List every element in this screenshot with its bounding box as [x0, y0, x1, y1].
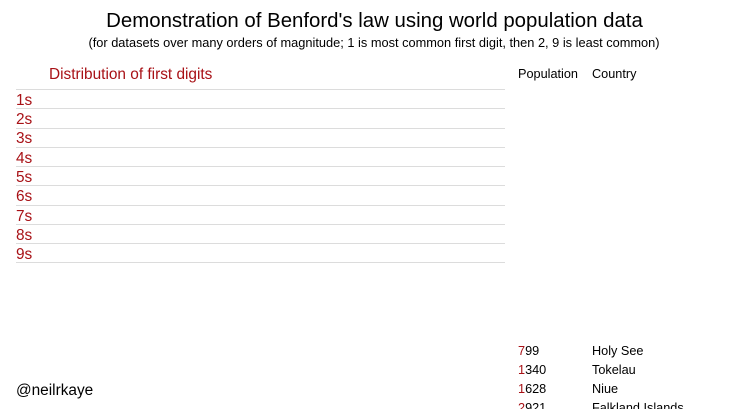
column heading: population: Population — [518, 67, 578, 81]
digit label 5s: 5s — [16, 169, 32, 186]
digit label 6s: 6s — [16, 188, 32, 205]
population row: Holy See: 799 — [518, 344, 539, 358]
digit distribution chart — [16, 89, 505, 263]
digit label 7s: 7s — [16, 208, 32, 225]
credit: @neilrkaye — [16, 382, 93, 399]
title: Demonstration of Benford's law using world population data — [106, 10, 643, 32]
population row: Niue: Niue — [592, 382, 618, 396]
digit label 3s: 3s — [16, 130, 32, 147]
digit label 4s: 4s — [16, 150, 32, 167]
population row: Holy See: Holy See — [592, 344, 643, 358]
population row: Tokelau: 1340 — [518, 363, 546, 377]
digit label 1s: 1s — [16, 92, 32, 109]
chart heading: Distribution of first digits — [49, 66, 212, 83]
population row: Tokelau: Tokelau — [592, 363, 636, 377]
digit label 9s: 9s — [16, 246, 32, 263]
population row: Falkland Islands — [518, 401, 684, 409]
population row: Tokelau — [518, 363, 636, 377]
population row: Niue: 1628 — [518, 382, 546, 396]
digit label 2s: 2s — [16, 111, 32, 128]
population row: Niue — [518, 382, 618, 396]
digit label 8s: 8s — [16, 227, 32, 244]
population row: Holy See — [518, 344, 643, 358]
subtitle: (for datasets over many orders of magnitude; 1 is most common first digit, then 2, 9 is least common) — [88, 35, 660, 50]
column heading: country: Country — [592, 67, 636, 81]
